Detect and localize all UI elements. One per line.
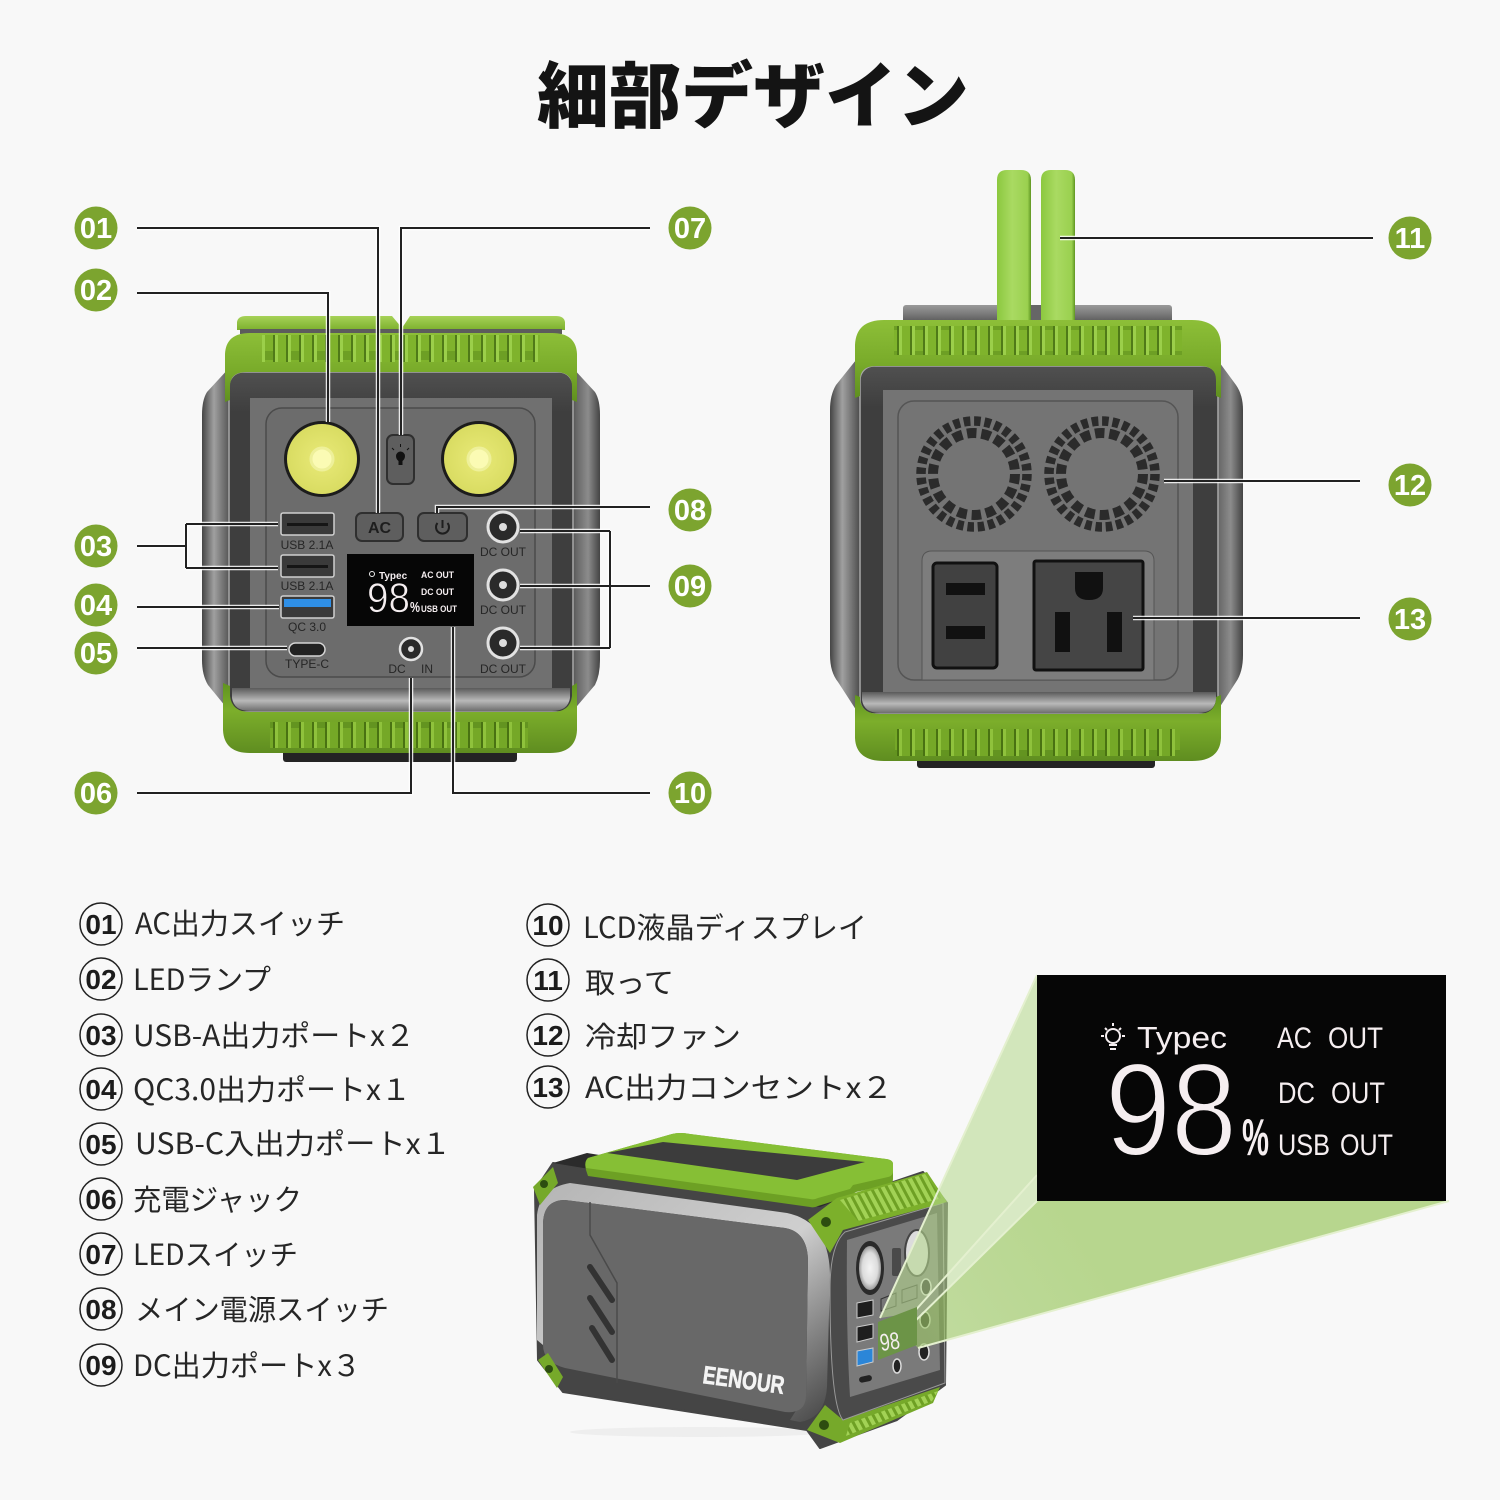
USB ports: TYPE-C: [285, 657, 329, 671]
cooling fan left: [921, 421, 1027, 527]
callout badges: 02: [80, 275, 112, 307]
USB ports: USB 2.1A: [281, 579, 333, 593]
LCD small: [347, 554, 474, 626]
side frame: [537, 1183, 830, 1422]
front LCD on perspective unit: [878, 1307, 917, 1360]
legend right column: 13: [532, 1072, 564, 1103]
callout badges: 01: [80, 213, 112, 245]
vent slots: [590, 1267, 612, 1360]
green bottom bumper: [855, 695, 1221, 761]
legend right column: LCD液晶ディスプレイ: [583, 905, 867, 947]
front controls: [856, 1241, 884, 1295]
callout badges: 09: [674, 571, 706, 603]
callout badges: 08: [674, 495, 706, 527]
product: front view: [202, 316, 600, 762]
legend left column: QC3.0出力ポートx１: [133, 1067, 411, 1109]
LCD small: DC OUT: [421, 587, 454, 597]
green lid: [585, 1133, 893, 1207]
LCD small: AC OUT: [421, 570, 454, 580]
legend left column: 06: [85, 1184, 117, 1215]
AC outlet three-pin: [1034, 561, 1143, 670]
DC in port: IN: [421, 662, 433, 676]
green bottom bumper: [223, 683, 577, 753]
AC button: AC: [368, 520, 392, 537]
DC in port: [388, 638, 433, 676]
legend left column: 07: [85, 1239, 117, 1270]
callout badges: 10: [674, 778, 706, 810]
LCD enlarged: DC: [1278, 1077, 1315, 1110]
legend left column: USB-A出力ポートx２: [133, 1013, 415, 1055]
LCD enlarged: Typec: [1137, 1020, 1227, 1055]
callout badges: 11: [1395, 223, 1425, 255]
icon: bulb: [1101, 1023, 1125, 1049]
legend left column: 03: [85, 1020, 117, 1051]
callout lines: [137, 228, 1373, 793]
AC outlet two-pin: [933, 563, 997, 668]
legend left column: 09: [85, 1350, 117, 1381]
LED switch: [387, 435, 414, 484]
USB ports: USB 2.1A: [281, 538, 333, 552]
DC out ports: DC OUT: [480, 603, 527, 617]
callout badges: 05: [80, 638, 112, 670]
battery percent: 98: [1105, 1036, 1237, 1183]
LCD enlarged: %: [1242, 1109, 1269, 1167]
legend right column: 10: [532, 910, 564, 941]
green top bumper: [855, 320, 1221, 398]
legend left column: USB-C入出力ポートx１: [135, 1121, 451, 1163]
AC button: [356, 513, 403, 541]
upper green bumper: [808, 1172, 947, 1253]
carrying handle: [903, 170, 1172, 323]
zoom beam: [880, 975, 1449, 1348]
legend left column: DC出力ポートx３: [133, 1343, 361, 1385]
outlet panel: [922, 551, 1154, 680]
LCD enlarged: OUT: [1328, 1022, 1383, 1055]
LCD small: Typec: [379, 571, 408, 582]
callout badges: 12: [1394, 470, 1426, 502]
logo: EENOUR: [701, 1361, 786, 1400]
front LCD on perspective unit: 98: [878, 1327, 902, 1357]
front face: [830, 1203, 945, 1420]
power button: [418, 513, 467, 541]
legend right column: 11: [533, 965, 563, 996]
body: [535, 1163, 947, 1448]
legend left column: 04: [85, 1074, 117, 1105]
DC in port: DC: [388, 662, 406, 676]
legend left column: 02: [85, 964, 117, 995]
DC out ports: [480, 512, 527, 676]
LED lamp right: [441, 421, 517, 497]
callout badges: [74, 206, 1432, 814]
green top bumper: [225, 333, 577, 402]
side panel: [543, 1200, 808, 1412]
callout badges: 06: [80, 778, 112, 810]
rear panel: [898, 401, 1178, 680]
legend left column: LEDランプ: [133, 957, 271, 999]
legend right column: 取って: [585, 960, 674, 1002]
handle on top: [237, 316, 565, 330]
callout badges: 03: [80, 531, 112, 563]
green corners: [533, 1167, 558, 1205]
legend left column: 05: [85, 1129, 117, 1160]
control panel: [266, 408, 535, 677]
legend left column: 充電ジャック: [133, 1177, 302, 1219]
legend right column: 12: [532, 1020, 564, 1051]
LCD small: 98: [367, 574, 410, 621]
product: perspective view: [533, 1133, 947, 1448]
callout badges: 07: [674, 213, 706, 245]
cooling fan right: [1049, 421, 1155, 527]
LCD enlarged: OUT: [1340, 1129, 1393, 1162]
legend left column: AC出力スイッチ: [135, 901, 345, 943]
product: rear view: [830, 170, 1243, 768]
LED lamp left: [284, 421, 360, 497]
LCD enlarged: USB: [1278, 1129, 1330, 1162]
LCD small: USB OUT: [421, 604, 457, 614]
legend left column: 01: [85, 909, 117, 940]
legend right column: AC出力コンセントx２: [585, 1065, 893, 1107]
DC out ports: DC OUT: [480, 662, 527, 676]
callout badges: 13: [1394, 604, 1426, 636]
DC out ports: DC OUT: [480, 545, 527, 559]
legend right column: [527, 904, 893, 1108]
LCD enlarged: OUT: [1331, 1077, 1385, 1110]
LCD small: %: [410, 599, 420, 616]
legend left column: LEDスイッチ: [133, 1232, 298, 1274]
legend left column: メイン電源スイッチ: [135, 1287, 389, 1329]
USB ports: QC 3.0: [288, 620, 326, 634]
legend left column: 08: [85, 1294, 117, 1325]
lower green bumper: [807, 1387, 940, 1443]
LCD enlarged: [1037, 975, 1446, 1201]
title: 細部デザイン: [537, 38, 969, 143]
callout badges: 04: [80, 590, 112, 622]
LCD enlarged: AC: [1277, 1022, 1312, 1055]
legend left column: [80, 901, 451, 1386]
USB ports: [281, 513, 334, 671]
legend right column: 冷却ファン: [585, 1014, 741, 1056]
